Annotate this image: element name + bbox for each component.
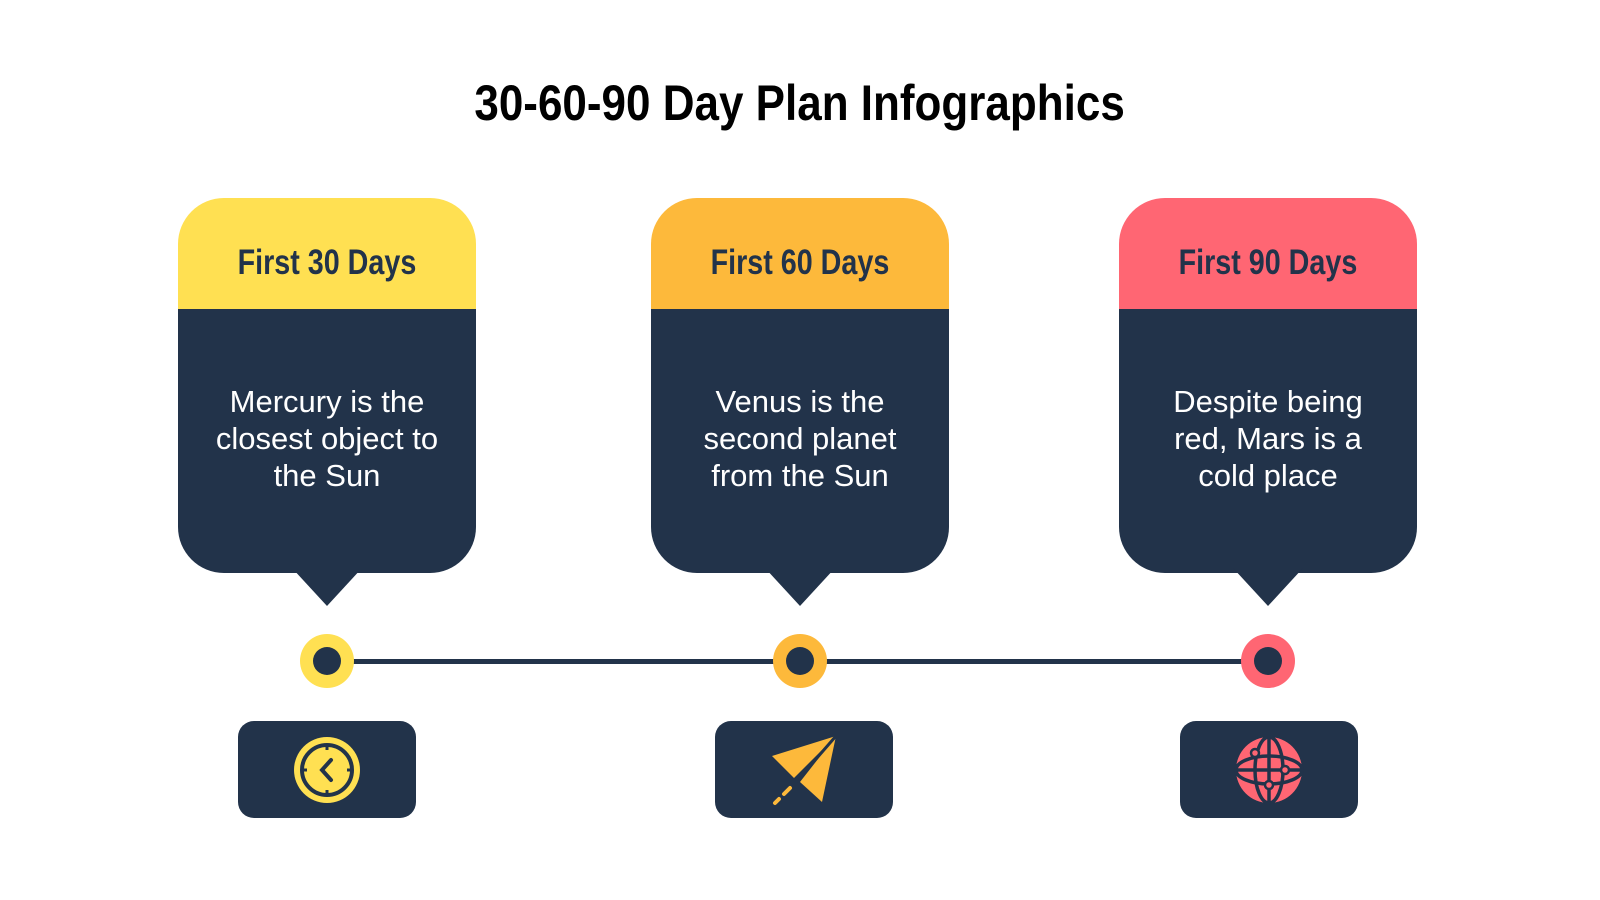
icon: globe — [1236, 738, 1302, 802]
pointer 60 — [765, 568, 835, 606]
body text 60: from the Sun — [711, 458, 889, 493]
header 60 — [651, 198, 949, 309]
body text 30: Mercury is the — [230, 384, 424, 419]
card: first 30 days — [178, 198, 476, 606]
body text 60: Venus is the — [716, 384, 884, 419]
body text 30: the Sun — [274, 458, 380, 493]
icon box: clock — [238, 721, 416, 818]
body text 60: second planet — [703, 421, 897, 456]
pointer 90 — [1233, 568, 1303, 606]
icon box: globe — [1180, 721, 1358, 818]
header 30 — [178, 198, 476, 309]
dot 60 — [773, 634, 827, 688]
header 60: First 60 Days — [711, 243, 889, 282]
icon: paper plane — [772, 736, 836, 806]
card: first 90 days — [1119, 198, 1417, 606]
body text 90: red, Mars is a — [1174, 421, 1362, 456]
body text 90 — [1119, 309, 1417, 573]
header 90: First 90 Days — [1179, 243, 1357, 282]
icon: clock — [294, 737, 360, 803]
dot 30 — [300, 634, 354, 688]
header 30: First 30 Days — [238, 243, 416, 282]
card: first 60 days — [651, 198, 949, 606]
timeline line — [327, 659, 1268, 664]
body text 60 — [651, 309, 949, 573]
dot 90 — [1241, 634, 1295, 688]
body text 90: cold place — [1198, 458, 1338, 493]
body text 30: closest object to — [216, 421, 438, 456]
icon box: paper plane — [715, 721, 893, 818]
pointer 30 — [292, 568, 362, 606]
title: 30-60-90 Day Plan Infographics — [475, 75, 1125, 131]
body text 30 — [178, 309, 476, 573]
body text 90: Despite being — [1173, 384, 1363, 419]
header 90 — [1119, 198, 1417, 309]
